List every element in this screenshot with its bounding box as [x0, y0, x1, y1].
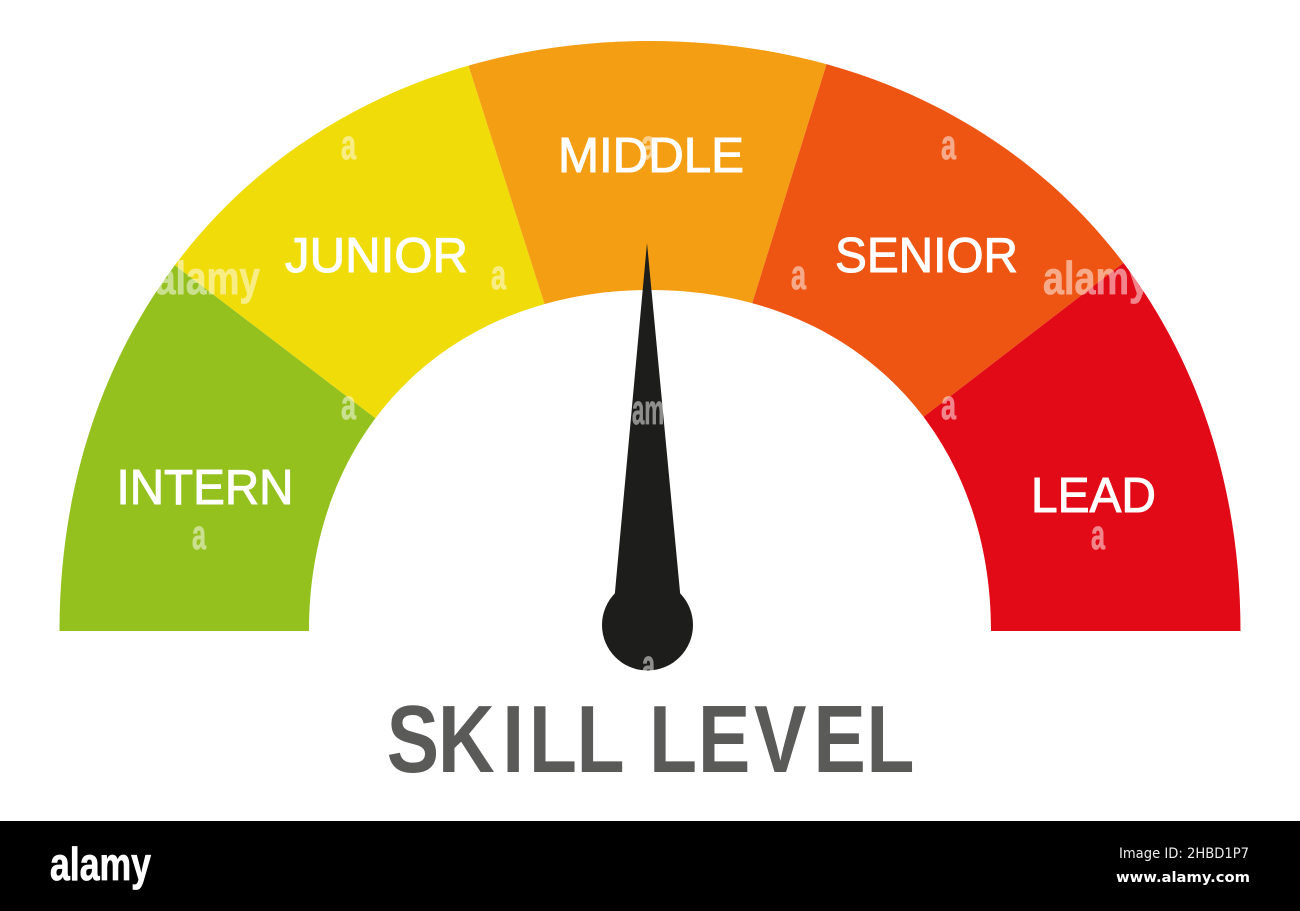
footer website: www.alamy.com [1116, 870, 1250, 886]
label: senior: SENIOR [835, 229, 1018, 283]
footer image id: Image ID: 2HBD1P7 [1119, 846, 1249, 862]
label: junior: JUNIOR [285, 229, 468, 283]
label: middle: MIDDLE [558, 129, 744, 183]
label: intern: INTERN [116, 461, 294, 515]
stock watermarks: alamy [1043, 252, 1150, 304]
stock watermarks: a [1091, 511, 1105, 558]
stock watermarks: a [491, 251, 506, 298]
stock watermarks: a [341, 381, 356, 428]
segment: intern [60, 265, 376, 631]
stock watermarks: a [341, 121, 356, 168]
stock watermarks: a [791, 251, 806, 298]
stock watermarks: a [941, 381, 956, 428]
stock watermarks: am [632, 386, 664, 433]
stock watermarks [155, 121, 1150, 688]
segment: middle [468, 41, 826, 304]
segment: junior [174, 66, 544, 418]
gauge arc [60, 41, 1240, 631]
stock watermarks: alamy [155, 252, 260, 304]
stock watermarks: a [641, 121, 656, 168]
label: lead: LEAD [1031, 469, 1156, 523]
stock watermarks: a [192, 511, 206, 558]
segment: lead [924, 263, 1240, 631]
gauge needle [602, 243, 693, 670]
stock watermarks: a [642, 641, 655, 688]
footer logo: alamy [50, 838, 151, 890]
stock watermarks: a [941, 121, 956, 168]
segment: senior [752, 64, 1124, 417]
title: SKILL LEVEL [387, 686, 914, 793]
footer bar [0, 821, 1300, 911]
